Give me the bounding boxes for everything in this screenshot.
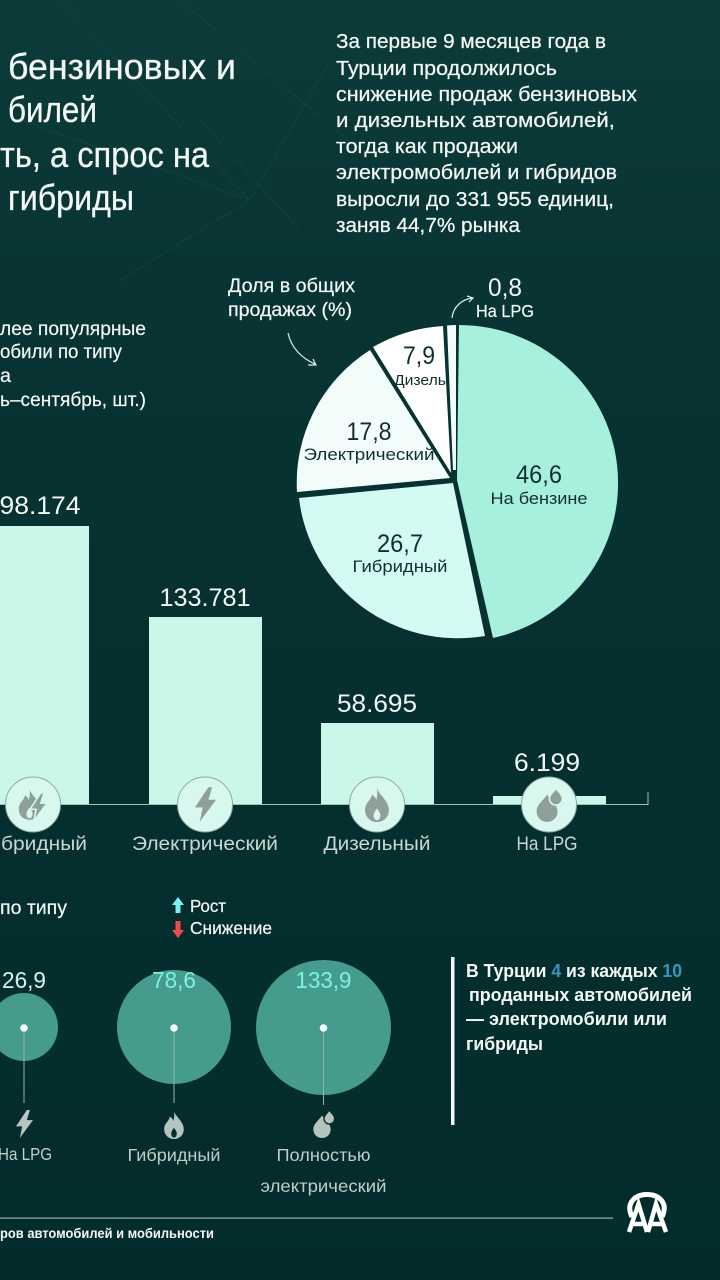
title: гибриды (8, 177, 134, 218)
callout: проданных автомобилей (469, 984, 692, 1005)
pie chart heading: продажах (%) (228, 300, 352, 321)
bar category labels: Электрический (132, 833, 278, 855)
pie labels: На бензине (490, 489, 588, 508)
intro text block: За первые 9 месяцев года в (336, 30, 606, 53)
bar values: 58.695 (337, 690, 417, 718)
slice: hybrid (299, 483, 485, 638)
icon: flame (164, 1111, 184, 1139)
bar values: 133.781 (160, 584, 250, 612)
arrow: rise (172, 897, 184, 913)
icon: electric (178, 777, 232, 832)
pie labels: Гибридный (352, 557, 448, 576)
bar chart heading: ь–сентябрь, шт.) (0, 389, 146, 411)
bar chart (0, 492, 648, 855)
arrow: LPG share to pie (452, 296, 473, 318)
bar: hybrid (0, 526, 89, 804)
bar values (0, 492, 580, 777)
intro text block: и дизельных автомобилей, (336, 109, 615, 132)
bar: LPG (493, 796, 606, 804)
bubble: fully electric (256, 960, 391, 1105)
pie labels: 17,8 (346, 418, 392, 446)
pie label: LPG share: На LPG (476, 301, 534, 321)
pie labels: 46,6 (516, 461, 562, 489)
arrow: fall (172, 921, 184, 938)
bubble: LPG: 26,9 (2, 967, 46, 993)
icon: drops (313, 1110, 335, 1138)
slice: petrol (457, 325, 618, 638)
pie label: LPG share (476, 274, 534, 321)
intro text block: Турции продолжилось (336, 57, 557, 80)
callout (451, 957, 692, 1125)
pie labels: 7,9 (403, 342, 435, 370)
bar values: 6.199 (514, 749, 580, 777)
bubble labels: Гибридный (128, 1145, 220, 1165)
bar: diesel (321, 723, 434, 804)
bubble chart (0, 960, 391, 1196)
arrow: pie heading to pie (288, 333, 316, 365)
pie chart heading (228, 276, 356, 321)
icon: bolt (16, 1110, 33, 1138)
intro text block: выросли до 331 955 единиц, (336, 188, 614, 211)
bubble: hybrid: 78,6 (152, 967, 196, 993)
title: билей (8, 89, 97, 130)
pie label: LPG share: 0,8 (488, 274, 522, 302)
pie labels: Дизель (394, 372, 446, 389)
intro text block: заняв 44,7% рынка (336, 214, 521, 237)
bar chart heading (0, 318, 146, 411)
bar values: 98.174 (0, 492, 81, 520)
bar category labels (1, 833, 578, 855)
intro text block: электромобилей и гибридов (336, 161, 617, 184)
callout: гибриды (466, 1033, 543, 1054)
title: ть, а спрос на (0, 134, 210, 175)
pie labels: Электрический (304, 445, 434, 464)
bubble labels: электрический (260, 1176, 386, 1196)
intro text block (336, 30, 638, 237)
bar: electric (149, 617, 262, 804)
bar category labels: бридный (1, 833, 87, 855)
footer: ров автомобилей и мобильности (0, 1226, 214, 1241)
intro text block: снижение продаж бензиновых (336, 83, 638, 106)
logo: AA (629, 1194, 666, 1232)
bar chart heading: лее популярные (0, 318, 146, 340)
pie chart (297, 325, 618, 638)
legend: Снижение (190, 918, 272, 938)
slice: electric (297, 350, 450, 492)
title (0, 46, 236, 218)
intro text block: тогда как продажи (336, 135, 518, 158)
pie labels (304, 342, 588, 576)
icon: LPG (522, 777, 576, 832)
title: бензиновых и (8, 46, 236, 87)
slice: diesel (373, 326, 451, 473)
pie labels: 26,7 (377, 530, 423, 558)
legend: Рост (190, 896, 226, 916)
bar chart heading: а (0, 365, 11, 387)
bubble labels (0, 1144, 386, 1196)
bar chart heading: обили по типу (0, 341, 122, 363)
bar category labels: На LPG (516, 833, 578, 855)
pie chart heading: Доля в общих (228, 276, 356, 297)
bubble section heading: по типу (0, 897, 67, 919)
bar category labels: Дизельный (324, 833, 430, 855)
bubble: hybrid (117, 967, 231, 1103)
legend (172, 896, 272, 938)
icon: hybrid (6, 777, 60, 832)
bubble: fully electric: 133,9 (296, 967, 352, 993)
bubble labels: Полностью (276, 1145, 370, 1165)
icon: diesel (350, 777, 404, 832)
callout: В Турции 4 из каждых 10 (466, 960, 682, 981)
callout: — электромобили или (466, 1008, 667, 1029)
bubble: LPG (0, 967, 58, 1103)
slice: LPG (447, 325, 456, 470)
